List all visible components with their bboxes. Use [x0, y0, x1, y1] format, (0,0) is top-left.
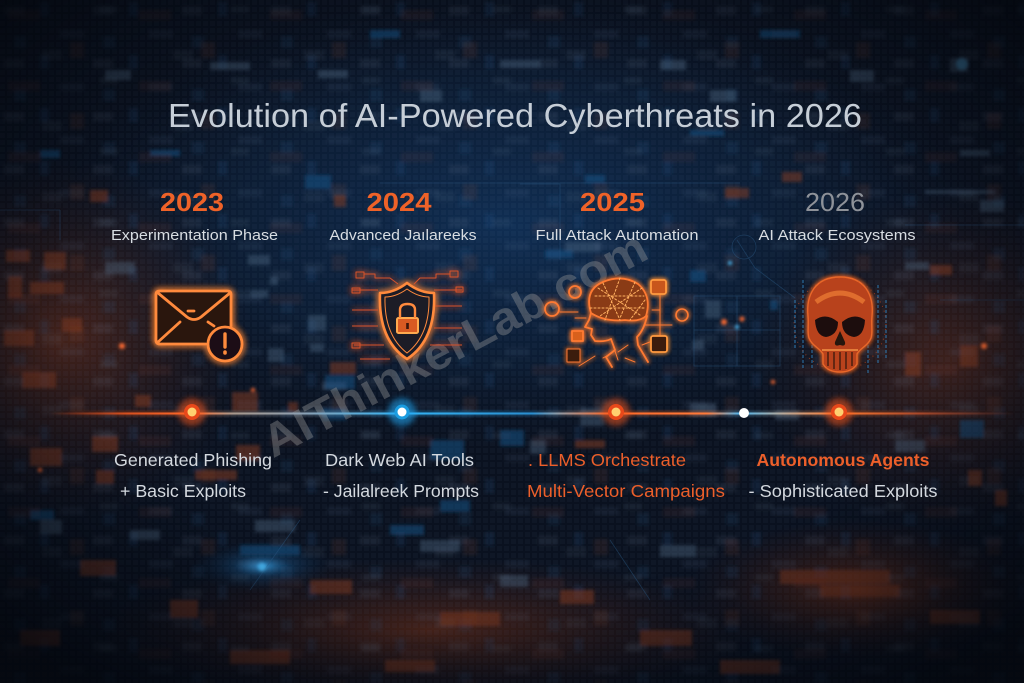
node: 2026 — [825, 398, 853, 426]
column: 2023 — [111, 189, 278, 501]
icon: shield and padlock — [352, 271, 463, 359]
icon: envelope with alert — [156, 291, 242, 361]
year: 2025: 2025 — [580, 189, 645, 217]
description: 2024: - Jailalreek Prompts — [323, 481, 479, 501]
column: 2026 — [748, 189, 938, 501]
description: 2026: Autonomous Agents — [756, 450, 930, 470]
node: 2024 — [388, 398, 416, 426]
subtitle: advanced jailbreaks: Advanced Jaılareeks — [330, 227, 476, 244]
column: 2024 — [323, 189, 479, 501]
watermark: AIThinkerLab.com — [253, 220, 656, 467]
year: 2024: 2024 — [366, 189, 432, 217]
description: 2025: . LLMS Orchestrate — [528, 450, 686, 470]
column: 2025 — [527, 189, 725, 501]
timeline — [50, 411, 1015, 416]
description: 2023 — [114, 450, 272, 501]
icon: glowing skull — [794, 277, 886, 374]
node: 2023 — [178, 398, 206, 426]
subtitle: experimentation phase: Experimentation Phase — [111, 227, 278, 244]
subtitle: ai attack ecosystems: AI Attack Ecosystems — [758, 227, 916, 244]
description: 2024: Dark Web AI Tools — [325, 450, 474, 470]
icon: AI head with circuit nodes — [545, 278, 688, 367]
description: 2023: + Basic Exploits — [120, 481, 246, 501]
description: 2025: Multi-Vector Campaigns — [527, 481, 725, 501]
description: 2026 — [748, 450, 938, 501]
title: Evolution of AI-Powered Cyberthreats in 2026 — [168, 97, 862, 134]
description: 2025 — [527, 450, 725, 501]
node: intermediate white — [739, 408, 749, 418]
description: 2023: Generated Phishing — [114, 450, 272, 470]
description: 2024 — [323, 450, 479, 501]
subtitle: full attack automation: Full Attack Automation — [536, 227, 698, 244]
year: 2026: 2026 — [805, 189, 865, 217]
description: 2026: - Sophisticated Exploits — [748, 481, 938, 501]
node: 2025 — [602, 398, 630, 426]
year: 2023: 2023 — [160, 189, 224, 217]
